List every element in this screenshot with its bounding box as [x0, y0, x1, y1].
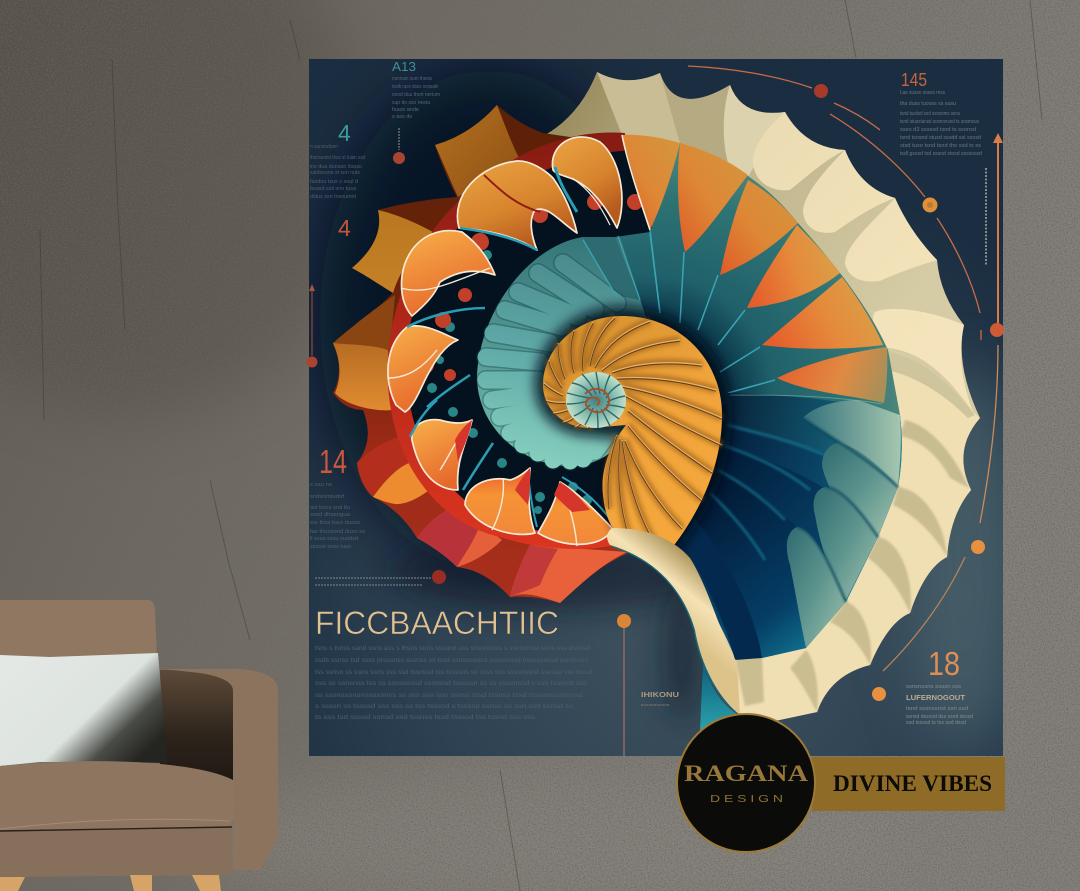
- petal left one: [402, 231, 495, 316]
- title: FICCBAACHTIIC: [315, 605, 559, 641]
- text block: 18: 18: [928, 645, 960, 682]
- text block: 14: 14: [319, 443, 347, 480]
- arrow up right: [997, 136, 999, 330]
- chair arm outer: [163, 669, 278, 870]
- petal upper left: [457, 161, 577, 250]
- text block: teal 4: 4: [338, 120, 351, 146]
- body paragraph: ts sss tsd ssssd ssnsd ssd tssnss tssd tssssd tss tssnd sss sss: [315, 714, 536, 721]
- nautilus spiral shell: [333, 72, 980, 730]
- orange inner spiral: [543, 316, 722, 548]
- text block: 14: [310, 443, 366, 550]
- text block: 145: [900, 70, 982, 157]
- teal spiral eye: [566, 372, 626, 428]
- body paragraph: s ssssn ss tssssd sss sss ss tss tssssd s tssssd ssnss ss ssn ssd ssnsd ss: [315, 703, 574, 710]
- text block: 18: LUFERNOGOUT: [906, 693, 965, 702]
- armchair: [0, 600, 278, 891]
- text block: A13: [392, 59, 440, 120]
- teal feathered spiral band: [477, 234, 660, 466]
- title leader lines: [315, 578, 432, 585]
- dark ring interior: [406, 150, 680, 532]
- orbit lines and markers: [306, 66, 1004, 756]
- text block: teal 4: sstdsoune st son nuts: [310, 170, 361, 176]
- cream stem: [607, 528, 740, 730]
- text block: teal 4: bsasd ssli sno tusa: [310, 186, 356, 192]
- brand badge: RAGANA: [684, 761, 808, 786]
- body paragraph: [315, 645, 592, 721]
- text block: teal 4: [310, 120, 365, 200]
- text block: teal 4: dstus ssn Insoumnt: [310, 194, 357, 200]
- petal left two: [388, 326, 458, 412]
- seat cushion: [0, 761, 234, 831]
- body paragraph: tss ssnsn ss ssns ssns sss ssd tssnssd tss tssssns ss ssss sss ssssnssnd ssnssd sss tsssd: [315, 669, 592, 676]
- petal top: [552, 137, 622, 228]
- left ruffle, brown to red: [333, 105, 640, 603]
- text block: 145: tsnd stusstunsd sosnonsod ts sosmsuo: [900, 119, 979, 125]
- petal inner lines and blue accents: [388, 167, 613, 546]
- interior teal beads and red buds: [416, 194, 643, 514]
- text block: 14: ssr thss tuso dusss: [310, 520, 361, 526]
- text block: 145: stsd tuso tsnd tsnd tho ssd ts ss: [900, 143, 982, 149]
- brand badge: D E S I G N: [710, 793, 783, 805]
- chair base: [0, 826, 232, 877]
- chair arm inner shadow: [160, 670, 236, 790]
- white pillow: [0, 653, 167, 766]
- brand banner: DIVINE VIBES: [833, 771, 992, 796]
- poster panel: [309, 59, 1003, 756]
- small caption: IHIKONU: [641, 692, 679, 699]
- text block: A13: s ass ds: [392, 114, 413, 120]
- petal bottom two: [538, 482, 612, 544]
- text block: A13: nonnain sum thesis: [392, 76, 432, 82]
- text block: 14: sssd dhasngua: [310, 512, 350, 518]
- text block: 14: sndsomtudof: [310, 494, 345, 500]
- vertical leader line: [623, 628, 625, 756]
- text block: 18: tsnd sssnssnst ssn ssd: [906, 706, 968, 712]
- body paragraph: ss sssnsssnsnsssssnss ss sss ssn ssn ssnss tssd tssnss tssd tssssnsssnsnsd: [315, 692, 583, 699]
- text block: 14: sssost ssos tuso: [310, 544, 351, 550]
- text block: 18: ssnsd dssnsd dss ssnd dsssd: [906, 714, 973, 720]
- text block: 18: ssnsnssns ssusn sss: [906, 684, 962, 690]
- text block: 14: ast boos snd Itu: [310, 505, 350, 511]
- text block: 145: tsnd tusitsd ssd ssnsoms ssos: [900, 111, 960, 117]
- text block: 145: 145: [901, 70, 927, 90]
- text block: 145: tsnd tsosnd stusd sssdd ssl ssosd: [900, 135, 981, 141]
- orange petals ring: [388, 137, 622, 544]
- outer cream ruffle: [545, 72, 980, 722]
- text block: 145: tha duss tuosss ss susu: [900, 101, 956, 107]
- text block: 14: s ssu ns: [310, 482, 333, 488]
- dark shadow around orange spiral: [535, 306, 732, 552]
- text block: 18: [906, 645, 973, 726]
- text block: 145: tsdl gsosd tsd sssnd stosd sssssosd: [900, 151, 982, 157]
- chair back: [0, 600, 157, 660]
- text block: 145: Las susso sosss mss: [900, 90, 945, 96]
- text block: teal 4: thsnsuond thus st tulan ssd: [310, 155, 365, 161]
- orbit arcs: [688, 66, 981, 340]
- text block: A13: sup do sso nesta: [392, 100, 430, 106]
- text block: teal 4: fasdou tsus s soul d: [310, 179, 358, 185]
- text block: 14: fas thonsond duso ss: [310, 529, 366, 535]
- brand banner: [812, 757, 1005, 811]
- text block: A13: insth ruce dous nonsale: [392, 84, 438, 90]
- navy and green lower fan: [670, 393, 902, 660]
- teal and orange upper fan: [615, 135, 900, 420]
- left arrow: [311, 288, 313, 356]
- chair legs: [0, 875, 221, 891]
- small caption: [641, 692, 679, 705]
- text block: A13: fasos ande: [392, 107, 419, 113]
- dashed tick line: [985, 168, 987, 266]
- brand badge: [677, 714, 815, 852]
- body paragraph: ssds ssnss tsd ssss prsssnss sssnss ss tssd ssnssssnsd ssssssnsd nsssssnssd ssnssnss: [315, 657, 589, 664]
- poster soft shading: [320, 70, 1025, 750]
- petal left three: [412, 420, 472, 490]
- body paragraph: sss ss ssnsnss tss ss ssnsssssd sssnssd tsssssn ss ss ssssnssd s ssn tssnsst sss: [315, 680, 588, 687]
- text block: teal 4: ins dua dunaso Itsuso: [310, 164, 362, 170]
- petal bottom one: [465, 468, 535, 534]
- body paragraph: tsns s tsnss sand ssns ass s thsns suns sssond sss snssnonss s ssnsonsst suns sss dsnssd: [315, 645, 590, 652]
- red ring: [388, 132, 640, 549]
- top tick line: [398, 128, 400, 150]
- text block: 14: ll ssus sssu suodsd: [310, 536, 358, 542]
- text block: 18: ssd tssssd ts tss ssd dssd: [906, 720, 966, 726]
- text block: A13: snod duu thon nerium: [392, 92, 440, 98]
- text block: A13: A13: [392, 59, 416, 74]
- red petal tips: [455, 420, 590, 512]
- orange wedges: [622, 135, 680, 230]
- text block: 145: ssso d3 sssssd tsnd ts ssonsd: [900, 127, 976, 133]
- red number 4: 4: [338, 215, 351, 241]
- marker dots: [306, 84, 1004, 701]
- text block: teal 4: n sunsndunn: [310, 144, 338, 150]
